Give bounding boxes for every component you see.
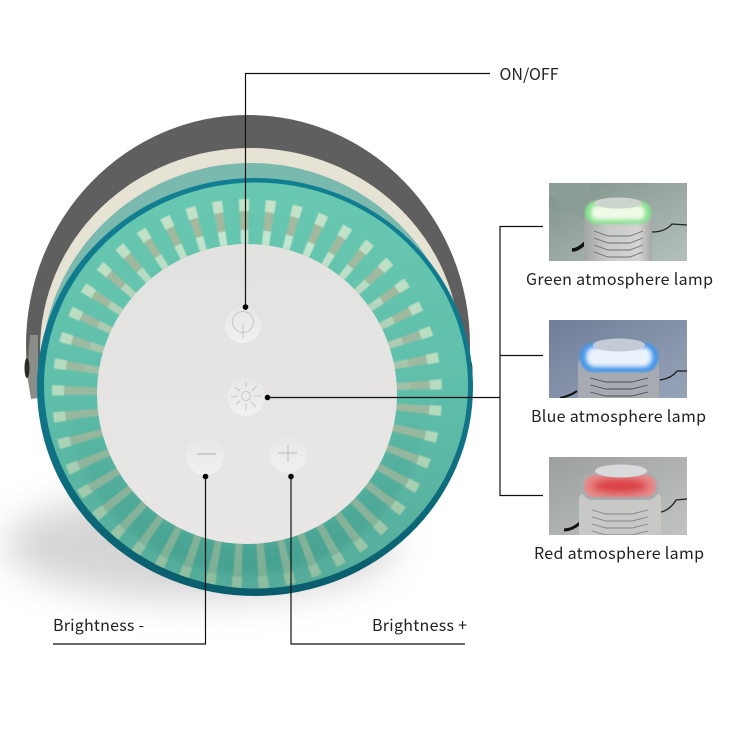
brightness minus leader <box>53 476 206 644</box>
brightness minus button <box>186 437 224 475</box>
radial ribs <box>47 194 447 594</box>
label: green atmosphere lamp: Green atmosphere lamp <box>526 266 713 290</box>
rib stems <box>67 214 427 574</box>
label: blue atmosphere lamp: Blue atmosphere lamp <box>531 403 706 427</box>
cream body band <box>40 148 454 352</box>
light mode button <box>227 378 265 416</box>
rib inner light segments <box>90 230 408 369</box>
rib outer tips <box>47 194 447 594</box>
label: brightness plus: Brightness + <box>372 612 467 636</box>
teal rim <box>37 178 473 596</box>
inner ring shading <box>82 229 412 559</box>
teal ring face <box>44 182 468 588</box>
atmosphere lamp leader <box>267 226 543 496</box>
metal handle <box>26 115 470 367</box>
photo: blue lamp <box>549 320 687 398</box>
callout dots <box>203 304 294 479</box>
handle buckle left <box>27 335 38 399</box>
lamp product illustration <box>5 115 473 600</box>
handle knob right <box>468 360 472 380</box>
label: red atmosphere lamp: Red atmosphere lamp <box>534 540 704 564</box>
floor shadow <box>5 490 395 600</box>
handle knob left <box>24 358 30 378</box>
photo: red lamp <box>549 457 687 542</box>
brightness plus leader <box>291 476 465 644</box>
on/off leader <box>246 74 490 310</box>
pale teal outer lip <box>44 163 430 332</box>
brightness plus button <box>269 435 307 473</box>
power button <box>225 307 261 343</box>
callout lines <box>53 74 543 644</box>
handle buckle right <box>463 345 470 397</box>
label: brightness minus: Brightness - <box>53 612 144 636</box>
photo: green lamp <box>549 183 687 268</box>
white control disc <box>97 244 397 544</box>
label: on/off: ON/OFF <box>500 61 559 85</box>
